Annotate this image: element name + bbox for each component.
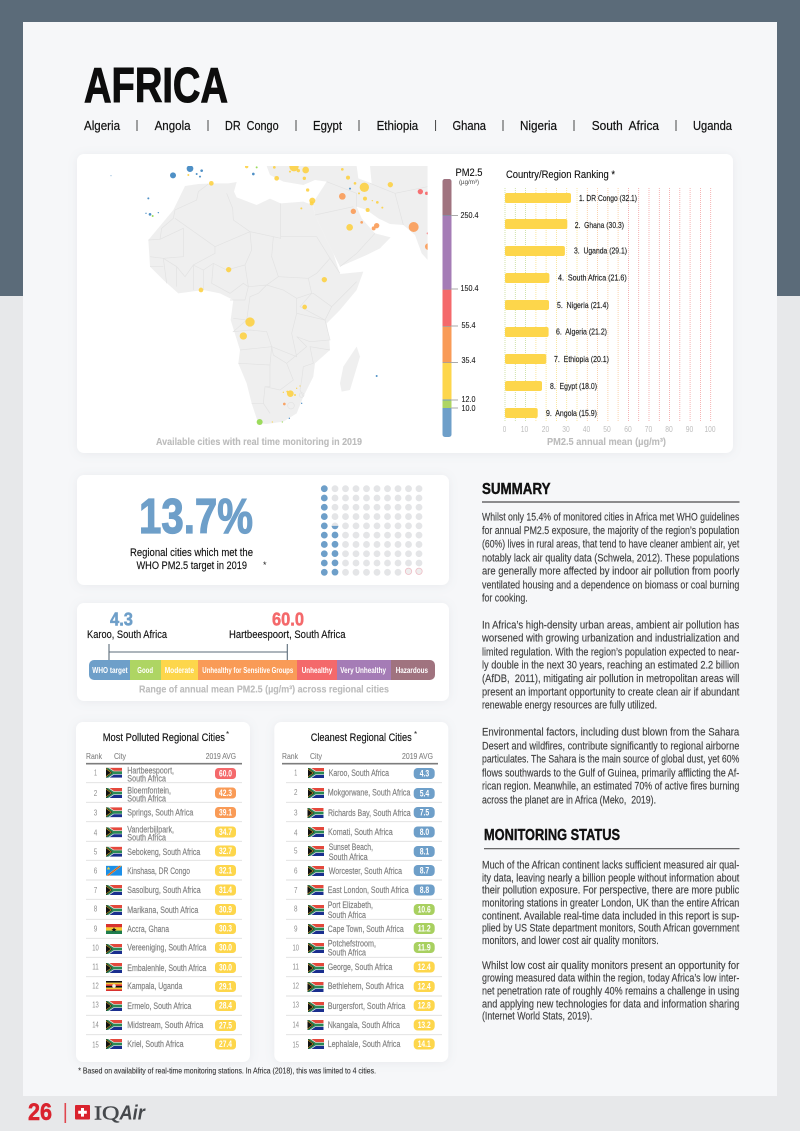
row 4: 4 — [294, 828, 298, 837]
row 1: 4.3 — [420, 769, 429, 779]
range bracket — [109, 644, 287, 660]
row 6: Worcester, South Africa — [329, 866, 402, 876]
text block: monitoring status: and applying new technologies for data and information sharing — [482, 998, 739, 1010]
row 13 — [292, 1000, 435, 1012]
range caption: Range of annual mean PM2.5 (µg/m³) across regional cities — [139, 684, 389, 696]
table heading: Cleanest Regional Cities — [311, 732, 412, 744]
row 9 — [94, 923, 236, 934]
row 5: 32.7 — [219, 846, 232, 856]
AQI category bar: Very Unhealthy — [340, 665, 386, 675]
PM2.5 legend scale: 55.4 — [462, 320, 476, 330]
row 6: 32.1 — [219, 866, 232, 876]
row 9: 9 — [94, 924, 98, 934]
country list: DR Congo — [225, 118, 279, 133]
text block: summary: Desert and wildfires, contribute significantly to regional airborne — [482, 740, 739, 752]
bar chart: country ranking: PM2.5 annual mean (µg/m³) — [547, 436, 666, 448]
bar chart: country ranking: 8. Egypt (18.0) — [550, 381, 597, 391]
text block: monitoring status: net penetration rate of roughly 40% remains a challenge in using — [482, 986, 739, 998]
table heading: Most Polluted Regional Cities — [103, 732, 225, 744]
row 5: 5 — [294, 847, 298, 856]
row 3: 3 — [294, 808, 298, 817]
row 10: 11.9 — [418, 943, 431, 953]
country list — [84, 118, 733, 133]
table column headers: Rank — [282, 751, 299, 761]
panel: map and ranking — [77, 154, 733, 453]
AQI category bar: Good — [137, 665, 153, 675]
table heading: * — [226, 730, 229, 739]
logo: IQAir — [75, 1102, 146, 1124]
row 3: Richards Bay, South Africa — [328, 808, 411, 818]
AQI category bar: Unhealthy — [302, 665, 332, 675]
row 10: 10 — [92, 943, 99, 952]
text block: summary: renewable energy resources are fully utilized. — [482, 700, 657, 712]
row 9: Accra, Ghana — [127, 924, 169, 934]
row 15: 14.1 — [418, 1039, 431, 1049]
bar chart: country ranking: 40 — [583, 424, 590, 434]
stat description: * — [263, 560, 267, 570]
PM2.5 legend scale: PM2.5 — [456, 167, 482, 179]
row 2: Bloemfontein, — [127, 785, 171, 795]
row 12 — [292, 981, 435, 992]
row 12: 12.4 — [418, 982, 431, 992]
AQI category bar: WHO target — [92, 665, 128, 675]
footer divider — [64, 1103, 66, 1123]
row 3: Springs, South Africa — [127, 807, 193, 817]
row 10 — [92, 942, 236, 954]
text block: summary: for cooking. — [482, 593, 528, 605]
PM2.5 legend scale: 150.4 — [460, 283, 479, 293]
bar chart: country ranking: 7. Ethiopia (20.1) — [554, 354, 609, 364]
row 4: South Africa — [127, 832, 166, 842]
title: AFRICA — [84, 59, 228, 113]
country list: Ghana — [452, 118, 487, 133]
row 14: 14 — [92, 1020, 99, 1030]
panel: cleanest cities table — [274, 722, 448, 1062]
row 1: 1 — [294, 769, 298, 778]
row 9: 9 — [294, 924, 298, 934]
country list: Ethiopia — [377, 118, 419, 133]
text block: monitoring status: continent. Available real-time data included in this report is sup- — [482, 910, 740, 922]
row 5: 8.1 — [420, 847, 429, 857]
lowest city value: 4.3 — [110, 609, 133, 630]
text block: summary: worsened with growing urbanization and industrialization and — [481, 633, 739, 645]
row 15: 27.4 — [219, 1039, 232, 1049]
AQI category bar: Unhealthy for Sensitive Groups — [202, 665, 293, 675]
row 15: 15 — [92, 1040, 99, 1049]
row 7: 31.4 — [219, 885, 232, 895]
bar chart: country ranking: 70 — [645, 424, 652, 434]
row 4 — [94, 824, 236, 842]
PM2.5 legend scale: 10.0 — [462, 403, 476, 413]
bar chart: country ranking: 60 — [624, 424, 632, 434]
row 7 — [294, 884, 435, 896]
row 5 — [94, 846, 236, 857]
panel: range of annual mean — [77, 603, 449, 701]
row 12 — [92, 981, 236, 992]
row 13: Burgersfort, South Africa — [328, 1001, 405, 1011]
dot grid: share of cities — [324, 489, 422, 574]
bar chart: country ranking: 20 — [542, 424, 549, 434]
row 2 — [294, 788, 435, 799]
text block: monitoring status: Whilst low cost air quality monitors present an opportunity for — [482, 960, 740, 972]
row 12: 12 — [292, 982, 299, 990]
logo: IQAir: Air — [119, 1102, 146, 1124]
text block: summary: (60%) lives in rural areas, that tend to have cleaner ambient air, yet — [482, 539, 739, 551]
bar chart: country ranking: Country/Region Ranking * — [506, 169, 616, 181]
row 12: 29.1 — [219, 982, 232, 992]
country list: Uganda — [693, 118, 733, 133]
text block: summary: for annual PM2.5 exposure, the majority of the region’s population — [482, 525, 739, 537]
country list: South Africa — [592, 118, 660, 133]
bar chart: country ranking: 3. Uganda (29.1) — [574, 246, 627, 256]
row 1: Karoo, South Africa — [329, 768, 389, 778]
stat description: Regional cities which met the — [130, 547, 253, 559]
row 14: 14 — [292, 1020, 299, 1030]
row 3 — [294, 807, 435, 818]
row 6: 6 — [94, 867, 98, 876]
row 13: 28.4 — [219, 1001, 232, 1011]
bar chart: country ranking: 0 — [503, 424, 506, 434]
row 4 — [294, 826, 435, 838]
row 1: South Africa — [127, 773, 166, 783]
row 7 — [94, 884, 236, 896]
bar chart: country ranking: 10 — [521, 424, 528, 434]
country list: Nigeria — [520, 118, 558, 133]
row 13 — [92, 1000, 236, 1011]
row 4: Komati, South Africa — [328, 827, 393, 837]
row 4: 4 — [94, 828, 98, 837]
row 14 — [292, 1020, 435, 1030]
row 3: 39.1 — [219, 808, 232, 818]
row 9: Cape Town, South Africa — [328, 924, 404, 934]
lowest city value: Karoo, South Africa — [87, 629, 168, 641]
footnote: * Based on availability of real-time monitoring stations. In Africa (2018), this was limited to 4 cities. — [78, 1066, 376, 1076]
text block: monitoring status — [482, 859, 740, 1023]
table column headers: 2019 AVG — [402, 751, 433, 761]
row 11: 11 — [92, 962, 99, 972]
PM2.5 legend scale — [442, 167, 482, 437]
row 5: Sunset Beach, — [329, 842, 373, 852]
row 1: 1 — [94, 769, 97, 778]
heading: summary: SUMMARY — [482, 481, 551, 498]
row 10 — [292, 938, 435, 958]
row 6: Kinshasa, DR Congo — [127, 866, 190, 876]
table column headers: Rank — [86, 751, 103, 761]
row 12: Kampala, Uganda — [127, 981, 182, 991]
table heading: * — [414, 730, 417, 739]
text block: summary: are generally more affected by indoor air pollution from poorly — [482, 566, 740, 578]
highest city value: Hartbeespoort, South Africa — [229, 629, 346, 641]
table column headers — [282, 751, 438, 764]
row 8: Marikana, South Africa — [127, 905, 198, 915]
row 7: 7 — [294, 886, 298, 895]
text block: summary — [481, 512, 740, 806]
bar chart: country ranking: 2. Ghana (30.3) — [575, 220, 624, 230]
text block: summary: limited regulation. With the region’s population expected to near- — [482, 646, 740, 658]
row 15 — [92, 1038, 236, 1050]
row 14: 27.5 — [219, 1021, 232, 1031]
text block: summary: Environmental factors, including dust blown from the Sahara — [482, 726, 740, 738]
row 8: 30.9 — [219, 905, 232, 915]
row 2: 5.4 — [420, 789, 429, 799]
row 14 — [92, 1020, 236, 1031]
bar chart: country ranking: 80 — [665, 424, 673, 434]
country list: Egypt — [313, 118, 342, 133]
row 2 — [94, 785, 236, 804]
bar chart: country ranking — [503, 169, 716, 448]
table column headers: City — [310, 751, 323, 761]
bar chart: country ranking: 30 — [562, 424, 570, 434]
row 10: Potchefstroom, — [328, 938, 376, 948]
row 10: South Africa — [328, 948, 366, 958]
text block: monitoring status: plied by US State department monitors, South African government — [482, 922, 739, 934]
row 10: 10 — [292, 943, 299, 952]
table column headers — [86, 751, 242, 764]
row 6 — [294, 865, 435, 876]
row 12: Bethlehem, South Africa — [328, 981, 404, 991]
row 2: 2 — [94, 789, 98, 798]
AQI category bar — [89, 660, 435, 680]
row 13: 13 — [292, 1000, 299, 1010]
text block: summary: ventilated housing and a dependence on biomass or coal burning — [482, 579, 739, 591]
stat description: WHO PM2.5 target in 2019 — [136, 560, 247, 572]
PM2.5 legend scale: (µg/m³) — [459, 180, 479, 186]
row 11 — [292, 962, 435, 973]
row 9: 30.3 — [219, 924, 232, 934]
row 13: 13 — [92, 1000, 99, 1010]
text block: summary: across the planet are in Africa (Meko, 2019). — [482, 794, 656, 806]
table column headers: City — [114, 751, 127, 761]
row 1 — [94, 765, 236, 783]
bar chart: country ranking: 100 — [704, 424, 716, 434]
panel: WHO target stat — [77, 475, 449, 585]
row 7: East London, South Africa — [328, 885, 409, 895]
row 8: 8 — [94, 904, 98, 914]
text block: summary: rican region. Meanwhile, an estimated 70% of active fires burning — [482, 781, 739, 793]
row 9 — [294, 923, 435, 934]
row 14: Nkangala, South Africa — [328, 1020, 400, 1030]
map caption: Available cities with real time monitoring in 2019 — [156, 436, 362, 448]
row 8: South Africa — [328, 910, 366, 920]
bar chart: country ranking: 6. Algeria (21.2) — [556, 326, 607, 336]
row 8: 8 — [294, 904, 298, 914]
row 11: George, South Africa — [328, 962, 392, 972]
row 14: 13.2 — [418, 1020, 431, 1030]
text block: summary: present an important opportunity to create clean air if abundant — [482, 686, 739, 698]
bar chart: country ranking: 9. Angola (15.9) — [546, 408, 597, 418]
row 4: Vanderbijlpark, — [127, 824, 174, 834]
text block: summary: (AfDB, 2011), mitigating air pollution in metropolitan areas will — [482, 673, 739, 685]
AQI category bar: Moderate — [165, 665, 194, 675]
row 5 — [294, 842, 435, 862]
bar chart: country ranking: 5. Nigeria (21.4) — [557, 300, 609, 310]
row 3: 3 — [94, 808, 98, 817]
row 12: 12 — [92, 982, 99, 990]
row 2: South Africa — [127, 794, 166, 804]
row 3 — [94, 807, 236, 818]
text block: summary: Whilst only 15.4% of monitored cities in Africa met WHO guidelines — [482, 512, 740, 524]
row 11: 11 — [292, 962, 299, 972]
logo: IQAir: IQ — [94, 1102, 120, 1124]
row 15: Kriel, South Africa — [127, 1039, 184, 1049]
text block: monitoring status: Much of the African continent lacks sufficient measured air qual- — [482, 859, 740, 871]
map of Africa with city bubbles — [110, 162, 432, 425]
row 1 — [294, 768, 435, 779]
row 11: 12.4 — [418, 962, 431, 972]
highest city value — [229, 609, 346, 641]
text block: monitoring status: their pollution exposure. For perspective, there are more public — [482, 885, 740, 897]
row 5: Sebokeng, South Africa — [127, 847, 200, 857]
text block: monitoring status: monitors, and lower cost air quality monitors. — [482, 935, 659, 947]
row 6: 8.7 — [420, 866, 429, 876]
row 6 — [94, 865, 236, 876]
row 7: 8.8 — [420, 885, 429, 895]
big percentage: 13.7% — [139, 490, 253, 544]
page number: 26 — [28, 1099, 52, 1126]
stat description — [130, 547, 267, 572]
row 9: 11.2 — [418, 924, 431, 934]
text block: monitoring status: (Internet World Stats, 2019). — [482, 1011, 592, 1023]
row 13: 12.8 — [418, 1001, 431, 1011]
row 11 — [92, 962, 236, 973]
PM2.5 legend scale: 12.0 — [462, 394, 476, 404]
row 13: Ermelo, South Africa — [127, 1001, 191, 1011]
lowest city value — [87, 609, 168, 641]
text block: summary: particulates. The Sahara is the main source of global dust, yet 60% — [482, 754, 739, 766]
AQI category bar: Hazardous — [396, 665, 428, 675]
text block: monitoring status: monitoring stations in greater London, UK than the entire African — [482, 897, 739, 909]
row 7: Sasolburg, South Africa — [127, 885, 201, 895]
row 8 — [294, 900, 435, 920]
panel: most polluted cities table — [76, 722, 250, 1062]
text block: summary: flows southwards to the Gulf of Guinea, primarily afflicting the Af- — [482, 767, 740, 779]
row 11: Embalenhle, South Africa — [127, 963, 206, 973]
bar chart: country ranking: 50 — [603, 424, 611, 434]
PM2.5 legend scale: 250.4 — [460, 210, 479, 220]
row 2: Mokgorwane, South Africa — [328, 788, 410, 798]
table column headers: 2019 AVG — [206, 751, 236, 761]
row 1: Hartbeespoort, — [127, 765, 174, 775]
row 2: 2 — [294, 788, 298, 797]
row 5: South Africa — [329, 852, 368, 862]
text block: monitoring status: ity data, leaving nearly a billion people without information about — [482, 872, 739, 884]
row 4: 34.7 — [219, 827, 232, 837]
row 7: 7 — [94, 886, 98, 895]
row 10: Vereeniging, South Africa — [127, 942, 206, 952]
text block: summary: notably lack air quality data (Schwela, 2012). These populations — [482, 552, 740, 564]
text block: summary: ly double in the next 30 years, reaching an estimated 2.2 billion — [482, 660, 739, 672]
country list: Angola — [155, 118, 191, 133]
highest city value: 60.0 — [272, 609, 304, 630]
row 15: 15 — [292, 1040, 299, 1049]
row 8: Port Elizabeth, — [328, 900, 373, 910]
row 6: 6 — [294, 867, 298, 876]
bar chart: country ranking: 90 — [686, 424, 693, 434]
row 11: 30.0 — [219, 963, 232, 973]
row 5: 5 — [94, 848, 98, 857]
PM2.5 legend scale: 35.4 — [462, 355, 476, 365]
bar chart: country ranking: 4. South Africa (21.6) — [558, 272, 627, 282]
row 4: 8.0 — [420, 827, 429, 837]
row 2: 42.3 — [219, 788, 232, 798]
row 15: Lephalale, South Africa — [328, 1039, 400, 1049]
bar chart: country ranking: 1. DR Congo (32.1) — [579, 193, 637, 203]
row 3: 7.5 — [420, 808, 429, 818]
row 1: 60.0 — [219, 769, 232, 779]
text block: summary: In Africa’s high-density urban areas, ambient air pollution has — [482, 619, 740, 631]
row 8: 10.6 — [418, 905, 431, 915]
country list: Algeria — [84, 118, 121, 133]
row 14: Midstream, South Africa — [127, 1020, 203, 1030]
row 15 — [292, 1038, 435, 1050]
heading: monitoring status: MONITORING STATUS — [484, 827, 620, 844]
row 10: 30.0 — [219, 943, 232, 953]
row 8 — [94, 904, 236, 915]
text block: monitoring status: growing measured data within the region, today Africa’s low inter- — [482, 972, 740, 984]
